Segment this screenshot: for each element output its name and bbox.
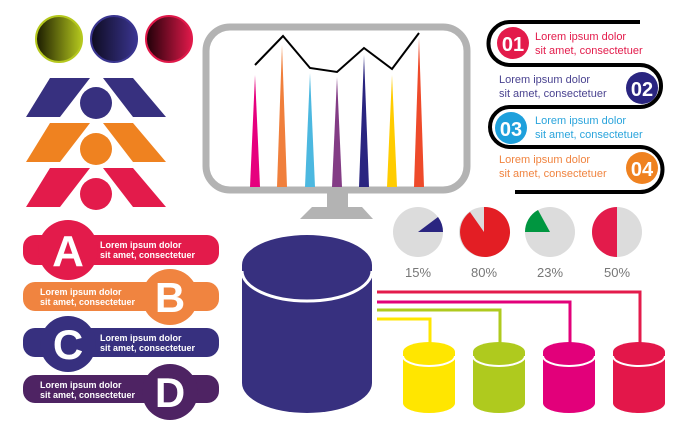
item 01: Lorem ipsum dolor bbox=[535, 31, 626, 43]
item 03: Lorem ipsum dolor bbox=[535, 115, 626, 127]
panel: numbered list bbox=[488, 22, 662, 192]
pie 15%: 15% bbox=[405, 265, 431, 280]
pie charts bbox=[393, 207, 642, 280]
item D: sit amet, consectetuer bbox=[40, 390, 136, 400]
item 03: sit amet, consectetuer bbox=[535, 129, 643, 141]
item 04: Lorem ipsum dolor bbox=[499, 154, 590, 166]
item A: sit amet, consectetuer bbox=[100, 250, 196, 260]
pie 80%: 80% bbox=[471, 265, 497, 280]
small cylinders bbox=[403, 342, 665, 413]
item B: Lorem ipsum dolor bbox=[40, 287, 122, 297]
pie 50% bbox=[592, 207, 642, 280]
item 02: Lorem ipsum dolor bbox=[499, 74, 590, 86]
item 01 bbox=[497, 27, 643, 59]
pie 15% bbox=[393, 207, 443, 280]
item A bbox=[23, 220, 219, 280]
big database cylinder bbox=[242, 235, 372, 413]
item 01: 01 bbox=[502, 34, 524, 56]
item A: Lorem ipsum dolor bbox=[100, 240, 182, 250]
item D: D bbox=[155, 369, 185, 416]
item 04 bbox=[499, 152, 658, 184]
item C: Lorem ipsum dolor bbox=[100, 333, 182, 343]
icon: gradient buttons bbox=[36, 16, 192, 62]
pie 23% bbox=[525, 207, 575, 280]
connector lines bbox=[377, 292, 640, 343]
item 04: 04 bbox=[631, 159, 654, 181]
item B: B bbox=[155, 274, 185, 321]
item 01: sit amet, consectetuer bbox=[535, 45, 643, 57]
item 02: sit amet, consectetuer bbox=[499, 88, 607, 100]
item 02 bbox=[499, 72, 658, 104]
item D: Lorem ipsum dolor bbox=[40, 380, 122, 390]
item C bbox=[23, 316, 219, 372]
panel: ABCD list bbox=[23, 220, 219, 420]
item B: sit amet, consectetuer bbox=[40, 297, 136, 307]
item 03: 03 bbox=[500, 119, 522, 141]
item C: C bbox=[53, 321, 83, 368]
item 04: sit amet, consectetuer bbox=[499, 168, 607, 180]
item C: sit amet, consectetuer bbox=[100, 343, 196, 353]
spikes bbox=[250, 38, 424, 187]
item A: A bbox=[52, 227, 84, 276]
item 02: 02 bbox=[631, 79, 653, 101]
line chart bbox=[255, 33, 419, 72]
monitor with spike chart bbox=[206, 27, 467, 219]
item 03 bbox=[495, 112, 643, 144]
pie 23%: 23% bbox=[537, 265, 563, 280]
pie 50%: 50% bbox=[604, 265, 630, 280]
pie 80% bbox=[459, 207, 510, 280]
icon: stacked A-shapes bbox=[26, 78, 166, 210]
item B bbox=[23, 269, 219, 325]
item D bbox=[23, 364, 219, 420]
